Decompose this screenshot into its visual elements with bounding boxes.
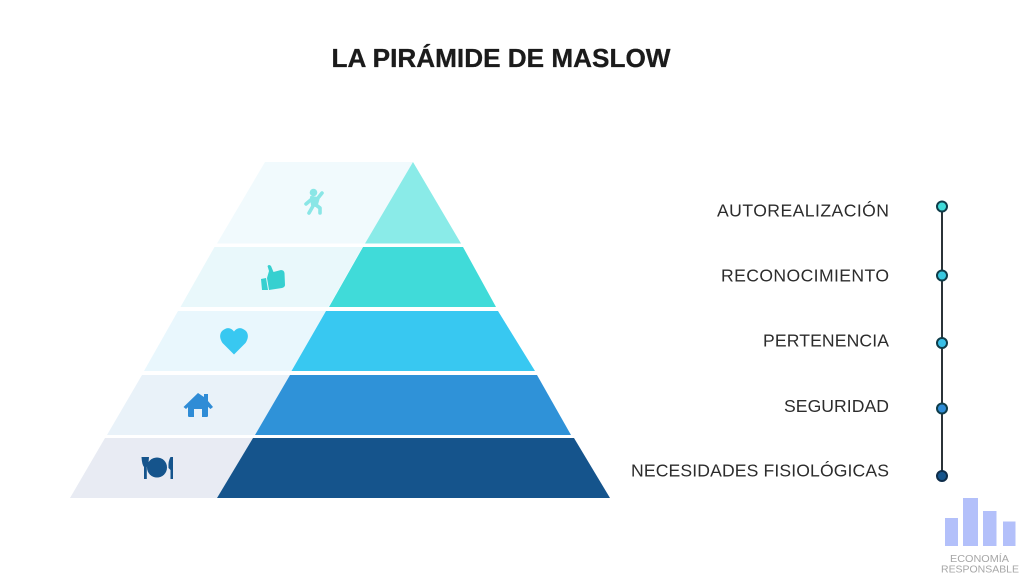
label: autorrealización: AUTOREALIZACIÓN [717, 200, 889, 220]
label: necesidades fisiológicas: NECESIDADES FISIOLÓGICAS [631, 460, 889, 480]
icon: dancing person [306, 189, 322, 213]
logo: Economía Responsable [941, 498, 1019, 576]
pyramid tier: pertenencia [292, 311, 535, 371]
pyramid tier: reconocimiento [329, 247, 496, 307]
icon: thumbs up [261, 265, 285, 290]
logo text: RESPONSABLE [941, 564, 1019, 576]
icon: heart [220, 328, 248, 354]
label: seguridad: SEGURIDAD [784, 396, 889, 416]
logo text: ECONOMÍA [950, 552, 1009, 565]
pyramid tier: necesidades fisiológicas [217, 438, 610, 498]
pyramid tier: autorrealización [365, 162, 461, 244]
panel: pale backing necesidades [70, 438, 253, 498]
marker: seguridad [937, 404, 947, 414]
marker: pertenencia [937, 338, 947, 348]
icon: plate and cutlery [142, 457, 173, 479]
panel: pale backing reconocimiento [180, 247, 362, 307]
panel: pale backing seguridad [107, 375, 290, 435]
panel: pale backing pertenencia [144, 311, 326, 371]
marker: autorrealización [937, 202, 947, 212]
pyramid tier: seguridad [255, 375, 571, 435]
label: pertenencia: PERTENENCIA [763, 330, 889, 350]
timeline [937, 202, 947, 481]
logo text [941, 552, 1019, 576]
title: LA PIRÁMIDE DE MASLOW [332, 44, 671, 73]
timeline line [941, 207, 943, 476]
marker: necesidades [937, 471, 947, 481]
marker: reconocimiento [937, 270, 947, 280]
icon: house [184, 393, 213, 417]
labels [631, 200, 889, 480]
panel: pale backing autorrealización [217, 162, 413, 244]
label: reconocimiento: RECONOCIMIENTO [721, 266, 889, 286]
pyramid chart [70, 162, 610, 498]
logo bars [945, 498, 1016, 546]
